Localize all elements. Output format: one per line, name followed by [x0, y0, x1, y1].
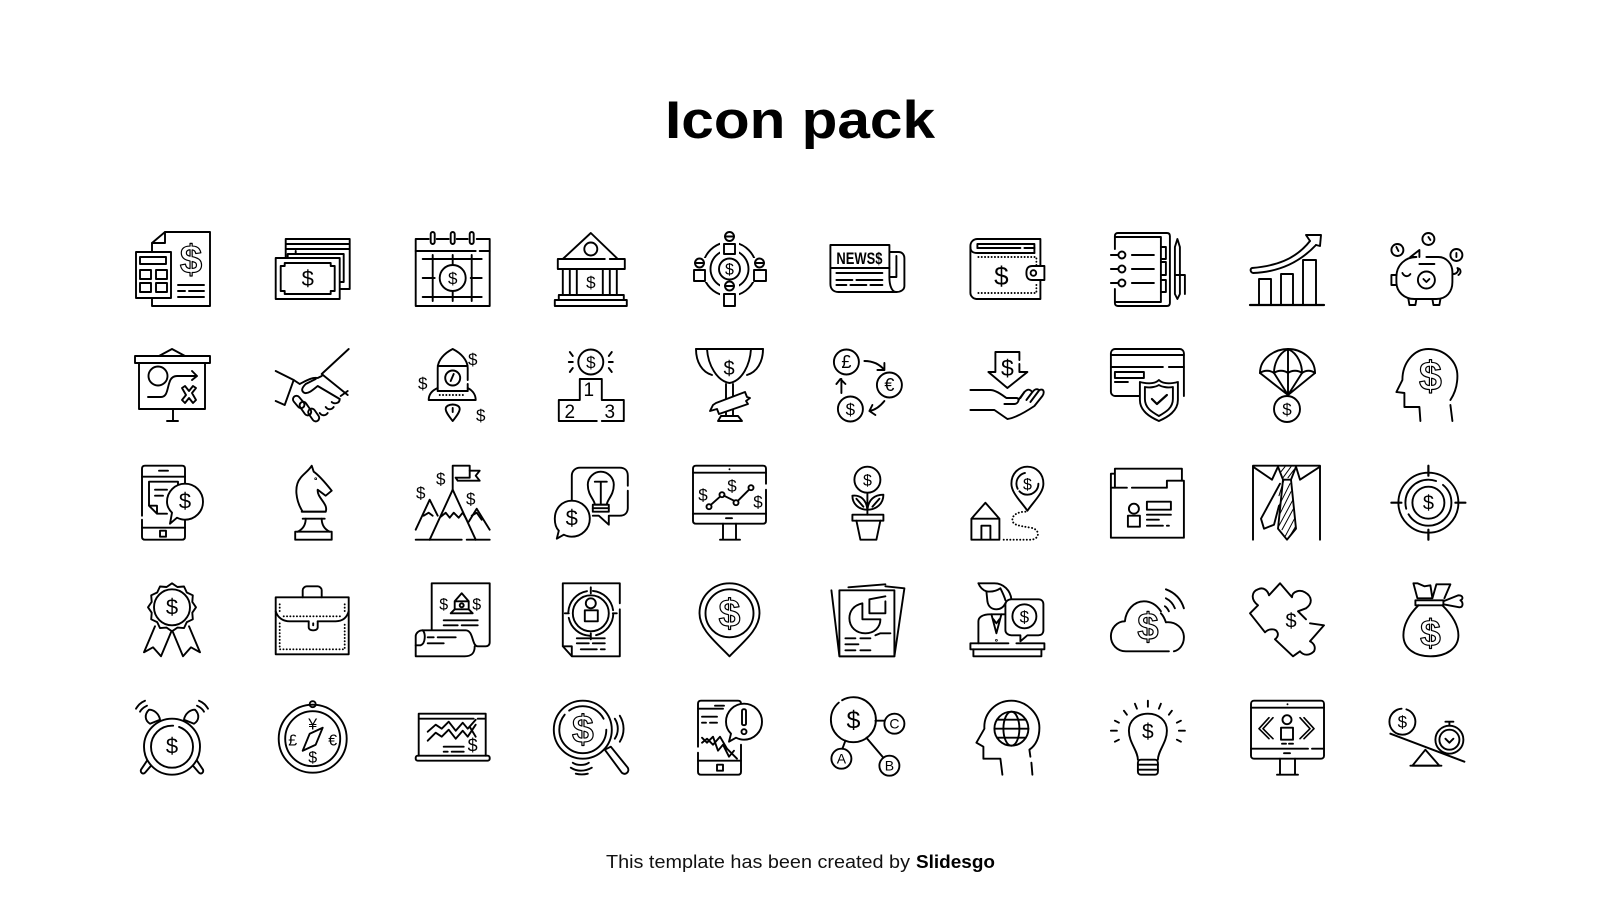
icon: balance of money and time: $ [1398, 713, 1408, 732]
icon: home and location: $ [1023, 477, 1032, 494]
icon: folder profile [1111, 469, 1184, 538]
icon: calculator and invoice [136, 232, 210, 306]
icon: speaker at podium [970, 583, 1044, 656]
icon: presentation board [135, 349, 210, 421]
icon: hand receiving money: $ [1001, 355, 1014, 381]
icon: mountains with flag: $ [436, 470, 446, 489]
icon: finance compass [279, 701, 347, 773]
icon: idea light bulb [1111, 701, 1185, 775]
icon: podium: $ [586, 353, 596, 372]
icon: laptop with stock chart: $ [468, 736, 478, 756]
icon: money bag [1403, 583, 1463, 656]
icon: phone with dollar message: $ [179, 489, 191, 514]
footer credit: This template has been created by [606, 852, 910, 872]
icon: magnifier with dollar: $ [572, 709, 594, 752]
icon: puzzle piece: $ [1285, 610, 1297, 632]
icon: head with dollar: $ [1419, 353, 1442, 399]
icon: award ribbon [144, 583, 200, 656]
icon: idea and money chat: $ [566, 506, 578, 531]
icon: podium [559, 350, 624, 423]
icon: potted money plant [852, 467, 883, 540]
icon: finance compass: £ [288, 733, 297, 750]
icon: newspaper [830, 245, 904, 292]
icon: wallet: $ [994, 261, 1009, 291]
icon: network nodes: A [837, 751, 847, 767]
icon: potted money plant: $ [863, 473, 872, 490]
icon: rocket launch: $ [476, 406, 486, 425]
icon: mountains with flag [416, 466, 490, 540]
icon: monitor with chart: $ [698, 486, 708, 505]
icon: balance of money and time [1389, 709, 1464, 766]
icon: calculator and invoice: $ [180, 238, 202, 282]
title: Icon pack [665, 91, 936, 150]
icon: people around coin [693, 232, 767, 307]
icon: finance compass: $ [308, 750, 317, 767]
icon: currency exchange: € [884, 375, 894, 395]
icon: mountains with flag: $ [416, 484, 426, 503]
icon: head with globe [976, 701, 1039, 775]
icon: map pin with dollar: $ [719, 592, 741, 635]
icon: bank [555, 233, 627, 306]
icon: people around coin: $ [725, 262, 734, 278]
icon: banknotes [276, 239, 350, 299]
icon: rocket launch: $ [418, 374, 428, 393]
icon: monitor with chart [693, 466, 766, 540]
icon: network nodes: $ [846, 707, 860, 735]
icon: currency exchange: £ [841, 352, 851, 372]
icon: head with dollar [1396, 349, 1457, 421]
icon: scroll with rocket [416, 583, 490, 656]
icon: bank: $ [586, 273, 596, 292]
icon: document with target profile [563, 583, 620, 656]
icon: monitor with chart: $ [753, 493, 763, 512]
icon: idea light bulb: $ [1142, 721, 1154, 744]
icon: suit and tie [1253, 466, 1320, 540]
icon: money cloud with signal [1111, 589, 1184, 651]
icon: idea and money chat [555, 468, 628, 539]
icon: trophy [696, 349, 763, 421]
icon: home and location [971, 467, 1043, 540]
icon: rocket launch [418, 349, 486, 425]
icon: wallet [970, 239, 1044, 299]
icon: report papers with pie chart [831, 584, 904, 656]
icon: monitor with chart: $ [727, 477, 737, 496]
icon: finance compass: € [328, 733, 337, 750]
icon: puzzle piece [1250, 583, 1324, 656]
icon: target coin [1391, 466, 1465, 540]
icon: finance compass: ¥ [307, 717, 317, 734]
icon: podium: 3 [605, 402, 615, 423]
icon: monitor with code and profile [1251, 701, 1324, 775]
icon: growth chart [1250, 235, 1324, 305]
icon: laptop with stock chart [416, 714, 490, 761]
icon: parachute: $ [1282, 400, 1292, 419]
icon: calendar [416, 232, 490, 306]
icon: chess knight [295, 466, 332, 540]
icon: scroll with rocket: $ [472, 596, 481, 613]
icon: speaker at podium: $ [1020, 607, 1030, 626]
icon: podium: 1 [584, 380, 594, 401]
icon: target coin: $ [1423, 493, 1434, 515]
icon: alarm clock: $ [166, 734, 178, 759]
icon: network nodes: B [885, 758, 894, 774]
icon: hand receiving money [970, 352, 1044, 419]
icon: banknotes: $ [302, 266, 314, 291]
icon: piggy bank [1391, 233, 1462, 305]
icon: map pin with dollar [700, 583, 760, 656]
icon: network nodes [831, 697, 904, 776]
icon: rocket launch: $ [468, 350, 478, 369]
icon: mountains with flag: $ [466, 490, 476, 509]
icon: award ribbon: $ [166, 594, 178, 619]
icon: newspaper: NEWS$ [836, 249, 883, 268]
footer credit: Slidesgo [916, 852, 995, 872]
icon: calendar: $ [448, 269, 458, 288]
icon: secure credit card [1111, 349, 1184, 421]
icon: magnifier with dollar [554, 701, 628, 774]
icon: trophy: $ [723, 358, 735, 380]
icon: briefcase [276, 586, 349, 654]
icon: podium: 2 [565, 402, 575, 423]
icon: parachute [1260, 349, 1315, 422]
icon: phone with dollar message [142, 466, 203, 540]
icon: scroll with rocket: $ [439, 596, 448, 613]
icon: currency exchange: $ [846, 400, 856, 419]
icon: notebook and pen [1111, 233, 1185, 306]
icon: money cloud with signal: $ [1137, 606, 1158, 648]
icon: phone market alert [698, 701, 762, 775]
icon: network nodes: C [889, 716, 899, 732]
icon: money bag: $ [1420, 612, 1441, 653]
icon: handshake [276, 349, 349, 423]
icon: currency exchange [834, 350, 902, 422]
icon: alarm clock [136, 701, 208, 775]
